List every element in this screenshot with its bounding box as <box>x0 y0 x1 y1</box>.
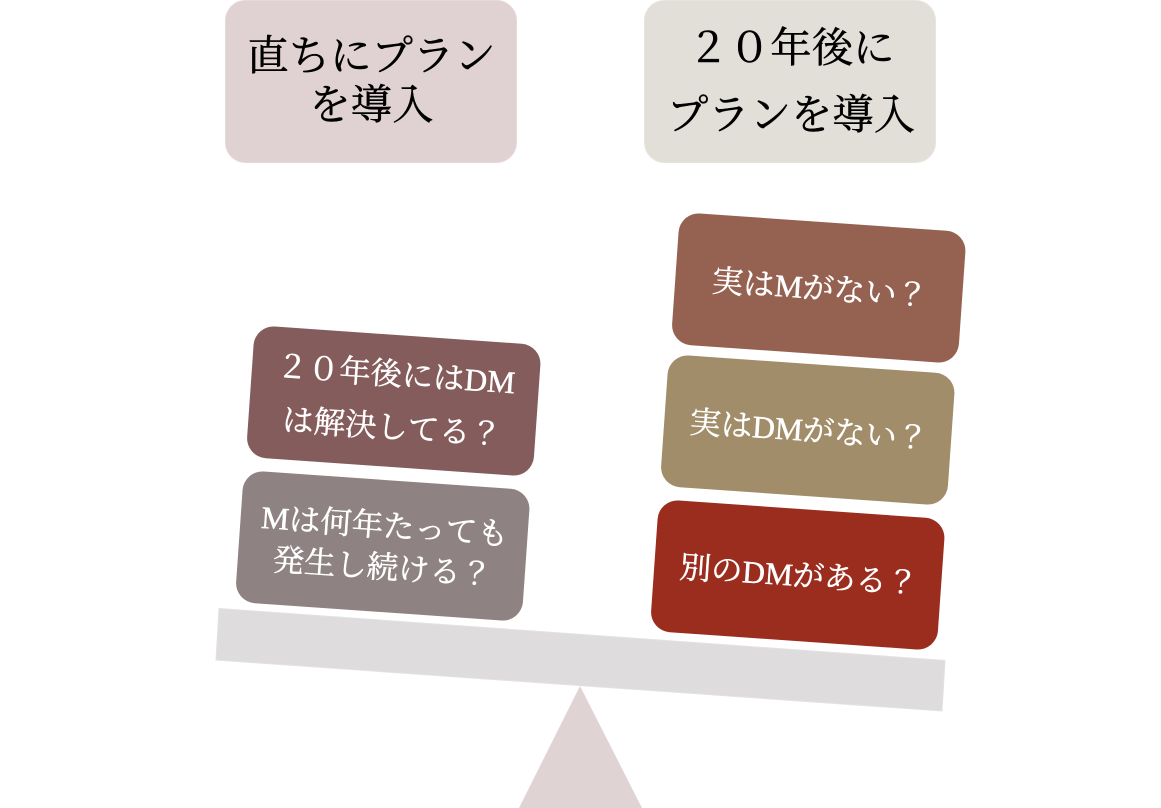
card: 実はMがない <box>671 212 967 364</box>
card: 別のDMがある <box>650 499 946 651</box>
card: 実はMがない: 実はMがない？ <box>711 264 929 314</box>
card: Mは何年たっても発生し続ける <box>235 470 531 622</box>
seesaw beam <box>216 608 945 711</box>
card: 実はDMがない <box>660 354 956 506</box>
heading: immediate plan: 直ちにプラン <box>247 33 496 79</box>
heading: immediate plan: を導入 <box>309 82 434 128</box>
card: Mは何年たっても発生し続ける: Mは何年たっても <box>260 500 510 552</box>
heading: plan after 20 years: プランを導入 <box>667 92 915 138</box>
heading: plan after 20 years <box>644 0 936 162</box>
card: 実はDMがない: 実はDMがない？ <box>689 405 929 456</box>
card: 20年後にはDMは解決してる <box>246 325 542 477</box>
card: 20年後にはDMは解決してる: は解決してる？ <box>281 402 503 453</box>
heading: immediate plan <box>226 0 516 162</box>
heading: plan after 20 years: ２０年後に <box>688 25 894 71</box>
seesaw fulcrum triangle <box>519 686 642 808</box>
card: 20年後にはDMは解決してる: ２０年後にはDM <box>275 349 516 400</box>
card: Mは何年たっても発生し続ける: 発生し続ける？ <box>272 542 493 593</box>
card: 別のDMがある: 別のDMがある？ <box>679 550 919 601</box>
